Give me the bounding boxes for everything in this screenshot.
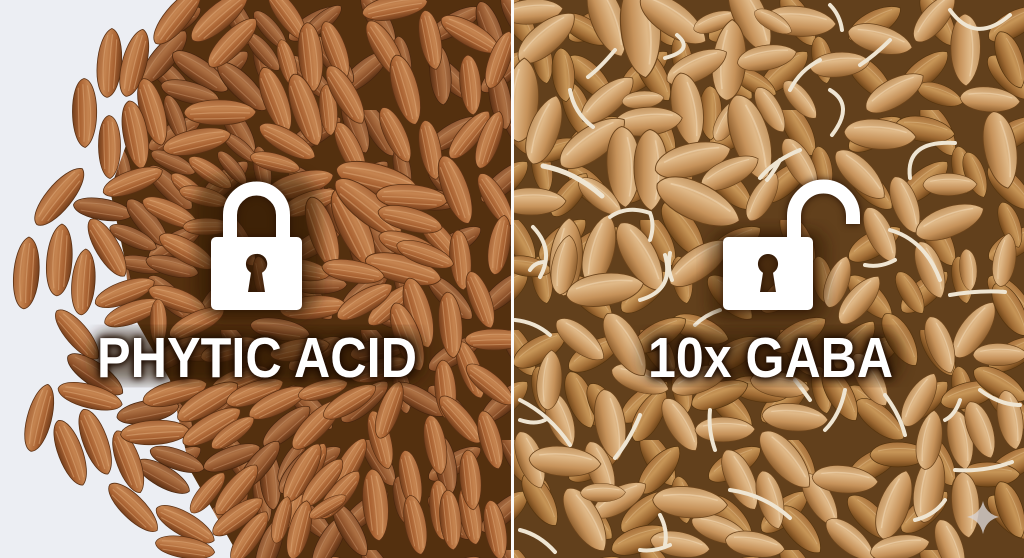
- dark halo behind lock and label: [640, 228, 902, 382]
- panel: sprouted rice (right): [500, 0, 1024, 558]
- grains: front layer: [500, 0, 1024, 558]
- icon: closed padlock: [211, 188, 302, 310]
- grains: back layer: [62, 0, 516, 558]
- icon: sparkle watermark: [967, 501, 999, 534]
- dark halo behind lock and label: [90, 175, 425, 382]
- white background: [0, 0, 232, 558]
- icon: open padlock: [723, 186, 853, 310]
- grains: back layer: [503, 6, 1024, 558]
- label: phytic acid: PHYTIC ACID: [97, 326, 417, 390]
- filler grains background: [514, 0, 1024, 558]
- grains: front layer: [11, 0, 525, 558]
- divider line: [511, 0, 514, 558]
- panel: unsprouted rice (left): [0, 0, 525, 558]
- label: 10x gaba: 10x GABA: [648, 326, 893, 390]
- sprouts: [515, 5, 1020, 552]
- filler grains under the pile: [110, 0, 511, 558]
